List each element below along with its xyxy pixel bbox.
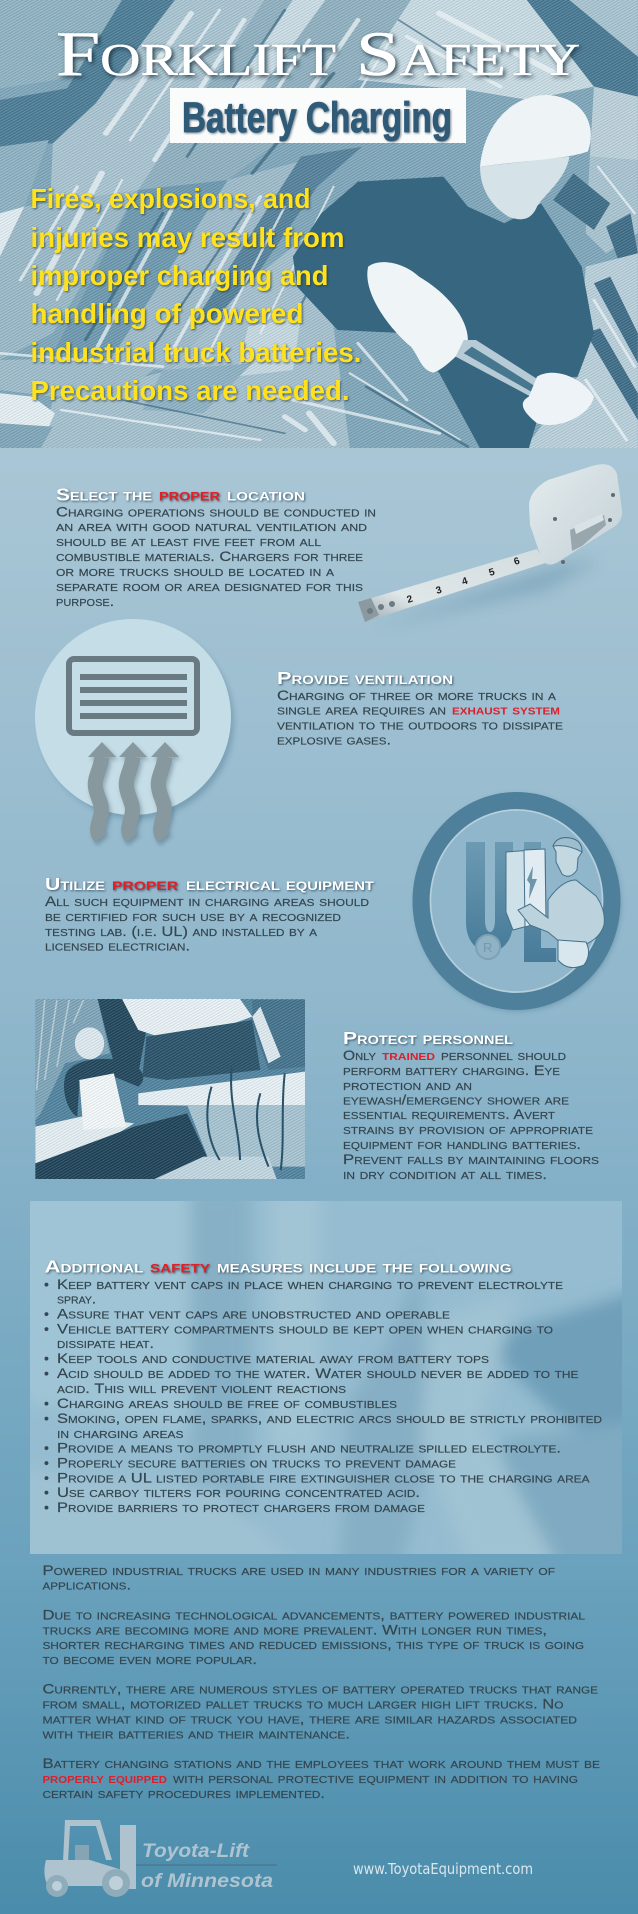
text block: closing paragraphs: Powered industrial trucks are used in many industries for a variety of [42,1562,555,1578]
bullet list: acid. This will prevent violent reactions [57,1380,346,1396]
body: personnel text: protection and an [343,1077,472,1093]
heading: additional safety measures: safety [150,1256,210,1276]
body: location text: or more trucks should be located in a [56,563,334,579]
worker glove left [367,262,468,373]
bullet list: Provide a UL listed portable fire extinguisher close to the charging area [57,1470,590,1486]
text block: closing paragraphs: with personal protective equipment in addition to having [173,1770,578,1786]
body: electrical equipment text: be certified for such use by a recognized [45,908,341,924]
text block: closing paragraphs: matter what kind of truck you have, there are similar hazards associated [42,1710,577,1726]
text block: closing paragraphs: to become even more popular. [42,1651,257,1667]
inspector with open panel [506,838,604,968]
bullet list [44,1276,602,1515]
registered mark: R [483,940,492,955]
body: electrical equipment text: licensed electrician. [45,938,190,954]
body: personnel text: eyewash/emergency shower are [343,1092,569,1108]
text block: closing paragraphs: Due to increasing technological advancements, battery powered industrial [42,1606,586,1622]
heading: additional safety measures [44,1256,512,1276]
hero photo: worker handling battery [0,0,638,448]
photo: technician at battery charger [35,999,305,1179]
UL letters [466,842,556,962]
body: ventilation text: exhaust system [452,702,560,718]
page background [0,448,638,1914]
logo: Toyota-Lift of Minnesota [44,1820,277,1897]
subtitle: Battery Charging: Battery Charging [182,94,452,142]
tool handle [456,340,536,396]
body: personnel text: trained [382,1048,435,1064]
bullet list: • [44,1365,49,1381]
heading: select the proper location: proper [159,484,220,504]
heading: additional safety measures: measures include the following [217,1256,512,1276]
worker face [480,157,570,219]
worker glove right [523,373,594,425]
body: personnel text: essential requirements. Avert [343,1106,555,1122]
body: personnel text: in dry condition at all times. [343,1166,547,1182]
title: Forklift Safety: Forklift Safety [56,18,580,89]
bullet list: spray. [57,1290,96,1306]
body: electrical equipment text: testing lab. (i.e. UL) and installed by a [45,923,317,939]
bullet list: • [44,1454,49,1470]
bullet list: in charging areas [57,1425,184,1441]
worker hard hat [480,95,591,167]
bullet list: Charging areas should be free of combustibles [57,1395,397,1411]
body: personnel text: strains by provision of appropriate [343,1121,593,1137]
bullet list: Properly secure batteries on trucks to prevent damage [57,1454,456,1470]
icon: tape measure: 2 [406,594,415,606]
text block: closing paragraphs: Currently, there are numerous styles of battery operated trucks that range [42,1680,598,1696]
body: ventilation text: Charging of three or more trucks in a [277,687,556,703]
hero warning text [30,183,362,406]
logo text: Toyota-Lift [142,1841,250,1862]
body: personnel text: Only [343,1047,376,1063]
bullet list: Vehicle battery compartments should be kept open when charging to [57,1320,553,1336]
bullet list: • [44,1320,49,1336]
body: ventilation text: explosive gases. [277,732,391,748]
bullet list: Provide barriers to protect chargers from damage [57,1499,425,1515]
heading: utilize proper electrical equipment: proper [112,874,178,894]
body: personnel text: equipment for handling batteries. [343,1136,581,1152]
bullet list: Acid should be added to the water. Water should never be added to the [57,1365,579,1381]
heading: additional safety measures: Additional [44,1256,144,1276]
bullet list: Assure that vent caps are unobstructed and operable [57,1306,450,1322]
bullet list: Keep battery vent caps in place when charging to prevent electrolyte [57,1276,563,1292]
hero warning text: Precautions are needed. [30,375,350,406]
bullet list: Smoking, open flame, sparks, and electric arcs should be strictly prohibited [57,1410,602,1426]
text block: closing paragraphs [42,1562,600,1801]
heading: provide ventilation: Provide ventilation [277,668,453,688]
worker torso [293,177,594,448]
body: personnel text: personnel should [441,1047,566,1063]
body: location text: an area with good natural ventilation and [56,518,367,534]
bullet list: • [44,1410,49,1426]
heading: utilize proper electrical equipment: electrical equipment [186,874,375,894]
text block: closing paragraphs: shorter recharging times and reduced emissions, this type of truck is going [42,1636,584,1652]
icon: tape measure: 5 [488,567,497,579]
bullet list: • [44,1499,49,1515]
body: location text: should be at least five feet from all [56,533,322,549]
heading: select the proper location: location [227,484,305,504]
bullet list: dissipate heat. [57,1335,154,1351]
panel background photo [30,1201,622,1554]
hero warning text: handling of powered [30,298,304,329]
text block: closing paragraphs: properly equipped [42,1771,167,1787]
text block: closing paragraphs: from small, motorized pallet trucks to much larger high lift trucks. No [42,1696,564,1712]
body: ventilation text: ventilation to the outdoors to dissipate [277,716,563,732]
bullet list: Use carboy tilters for pouring concentrated acid. [57,1484,420,1500]
text block: closing paragraphs: applications. [42,1576,131,1592]
bullet list: • [44,1484,49,1500]
section: utilize proper electrical equipment [45,874,375,954]
bullet list: • [44,1470,49,1486]
logo text [141,1841,273,1892]
heading: protect personnel: Protect personnel [343,1028,513,1048]
body: location text [56,504,376,609]
section: provide ventilation [277,668,563,748]
body: personnel text: perform battery charging. Eye [343,1062,560,1078]
wavy airflow arrows [88,742,179,838]
icon: tape measure [358,464,622,628]
body: electrical equipment text [45,893,369,954]
body: ventilation text: single area requires an [277,702,446,718]
icon: forklift [44,1820,136,1897]
bullet list: • [44,1440,49,1456]
hero warning text: industrial truck batteries. [30,337,362,368]
registered mark [476,935,500,959]
section: protect personnel [343,1028,599,1182]
hero warning text: injuries may result from [30,222,344,253]
heading: select the proper location [56,484,305,504]
icon: tape measure: 6 [513,556,522,568]
icon: UL badge with inspector [415,795,621,1011]
bullet list: • [44,1350,49,1366]
icon: tape measure: 3 [435,585,444,597]
body: ventilation text [277,687,563,748]
icon: ventilation circle [35,619,234,838]
vent grille [69,659,197,733]
logo text: of Minnesota [141,1871,273,1892]
text block: closing paragraphs: trucks are becoming more and more prevalent. With longer run times, [42,1622,547,1638]
hero warning text: improper charging and [30,260,328,291]
body: location text: combustible materials. Chargers for three [56,548,363,564]
panel: additional safety measures [30,1201,622,1554]
body: location text: purpose. [56,593,114,609]
body: personnel text: Prevent falls by maintaining floors [343,1151,599,1167]
bullet list: • [44,1395,49,1411]
body: personnel text [343,1047,599,1182]
bullet list: Provide a means to promptly flush and neutralize spilled electrolyte. [57,1440,561,1456]
heading: utilize proper electrical equipment: Utilize [45,874,105,894]
heading: select the proper location: Select the [56,484,152,504]
text block: closing paragraphs: with their batteries and their maintenance. [42,1726,350,1742]
section: select the proper location [56,484,376,609]
body: electrical equipment text: All such equipment in charging areas should [45,893,369,909]
icon: tape measure: 4 [461,576,470,588]
photo streaks [0,10,635,443]
text block: closing paragraphs: certain safety procedures implemented. [42,1785,325,1801]
body: location text: Charging operations should be conducted in [56,504,376,520]
bullet list: • [44,1276,49,1292]
hero warning text: Fires, explosions, and [30,183,310,214]
bullet list: • [44,1306,49,1322]
text block: closing paragraphs: Battery changing stations and the employees that work around them must be [42,1755,600,1771]
body: location text: separate room or area designated for this [56,578,363,594]
heading: utilize proper electrical equipment [45,874,375,894]
bullet list: Keep tools and conductive material away from battery tops [57,1350,489,1366]
website URL: www.ToyotaEquipment.com [353,1860,533,1878]
